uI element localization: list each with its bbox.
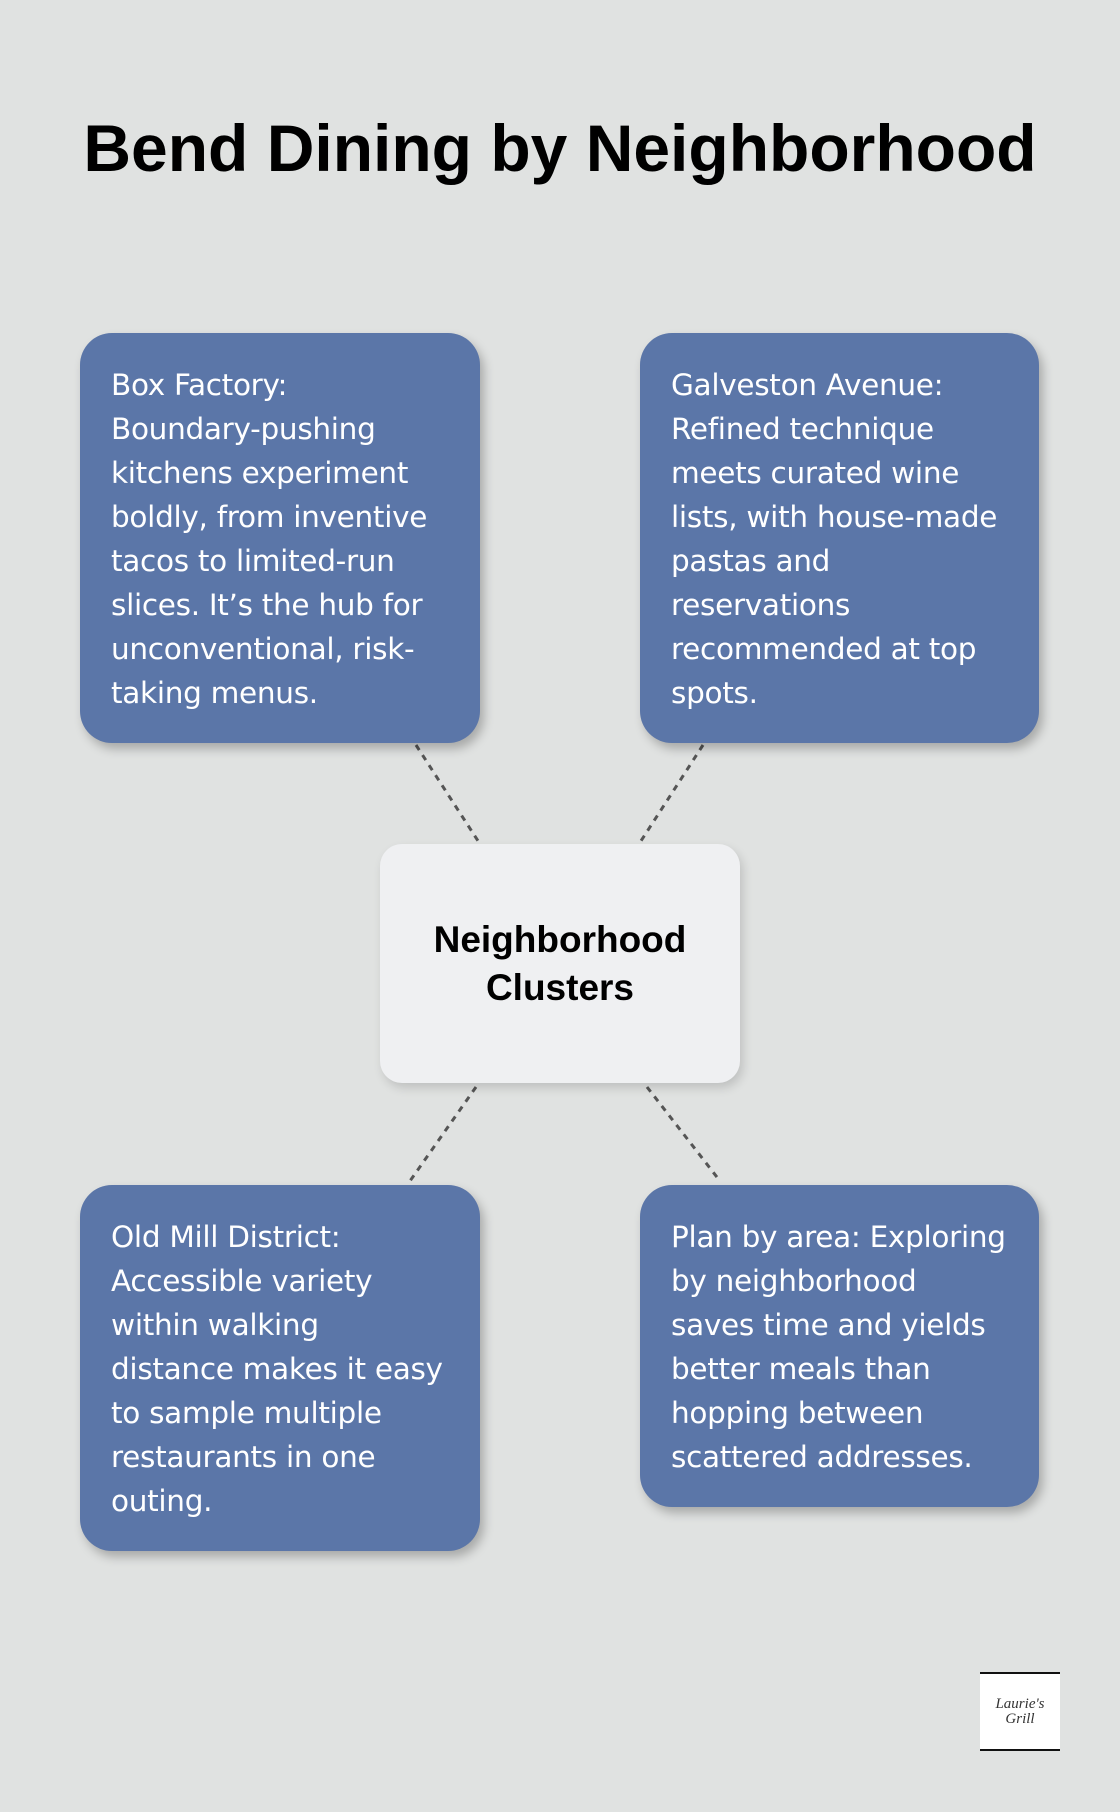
panel: galveston avenue: recommended at top	[671, 632, 976, 666]
panel: box factory: tacos to limited-run	[111, 544, 395, 578]
panel: old mill district: to sample multiple	[111, 1396, 382, 1430]
panel: galveston avenue: meets curated wine	[671, 456, 959, 490]
title: Bend Dining by Neighborhood	[83, 111, 1037, 185]
panel: old mill district: Accessible variety	[111, 1264, 372, 1298]
panel: box factory: Box Factory:	[111, 368, 287, 402]
center node: Neighborhood	[434, 918, 686, 960]
panel: old mill district: Old Mill District:	[111, 1220, 340, 1254]
center node: Clusters	[486, 966, 634, 1008]
panel: galveston avenue: spots.	[671, 676, 758, 710]
center node	[380, 844, 740, 1083]
logo: Laurie's	[995, 1696, 1045, 1712]
panel: galveston avenue: Galveston Avenue:	[671, 368, 943, 402]
panel: old mill district: within walking	[111, 1308, 319, 1342]
panel: plan by area: hopping between	[671, 1396, 923, 1430]
panel: galveston avenue	[640, 333, 1039, 743]
panel: old mill district: distance makes it easy	[111, 1352, 443, 1386]
panel: box factory: unconventional, risk-	[111, 632, 414, 666]
panel: box factory: Boundary-pushing	[111, 412, 376, 446]
panel: box factory: slices. It’s the hub for	[111, 588, 422, 622]
panel: box factory: kitchens experiment	[111, 456, 408, 490]
panel: plan by area: by neighborhood	[671, 1264, 916, 1298]
panel: box factory	[80, 333, 480, 743]
panel: box factory: taking menus.	[111, 676, 318, 710]
panel: galveston avenue: pastas and	[671, 544, 830, 578]
panel: box factory: boldly, from inventive	[111, 500, 427, 534]
panel: old mill district: restaurants in one	[111, 1440, 375, 1474]
panel: plan by area	[640, 1185, 1039, 1507]
panel: plan by area: Plan by area: Exploring	[671, 1220, 1006, 1254]
panel: old mill district	[80, 1185, 480, 1551]
panel: plan by area: saves time and yields	[671, 1308, 986, 1342]
panel: galveston avenue: Refined technique	[671, 412, 934, 446]
panel: galveston avenue: reservations	[671, 588, 850, 622]
logo	[980, 1672, 1060, 1751]
panel: galveston avenue: lists, with house-made	[671, 500, 997, 534]
panel: plan by area: scattered addresses.	[671, 1440, 972, 1474]
panel: plan by area: better meals than	[671, 1352, 931, 1386]
logo: Grill	[1005, 1710, 1035, 1726]
panel: old mill district: outing.	[111, 1484, 212, 1518]
